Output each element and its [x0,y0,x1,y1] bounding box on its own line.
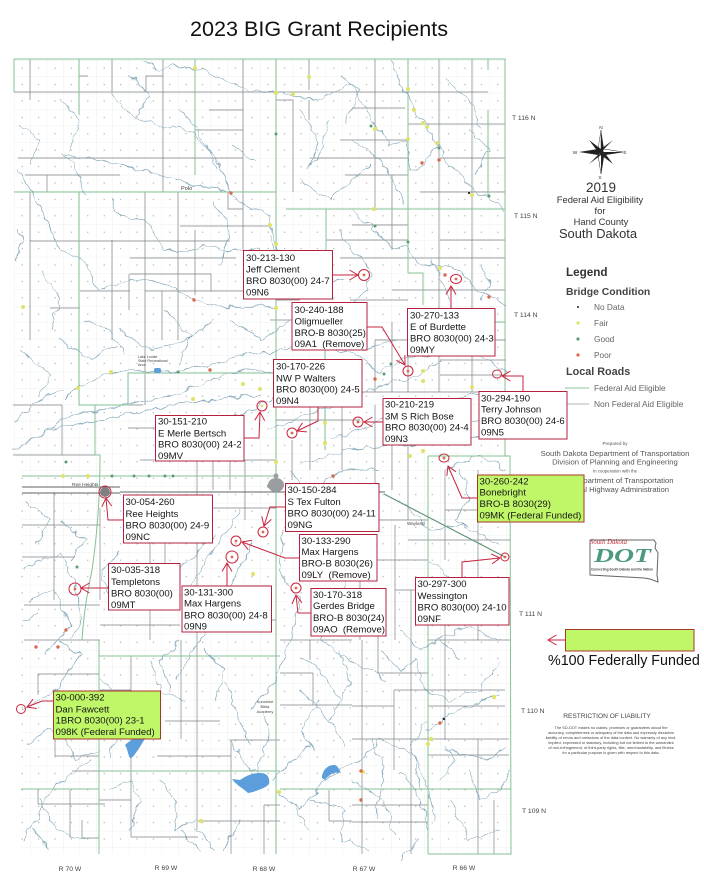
town labels: Ree Heights [72,482,99,488]
callout: 30-133-290 Max Hargens: Max Hargens [302,547,359,558]
callout: 30-210-219 3M S Rich Bose [383,398,471,445]
callout: 30-170-226 NW P Walters: BRO 8030(00) 24-5 [276,384,360,396]
title: 2023 BIG Grant Recipients [190,16,448,41]
restriction of liability: The SD-DOT makes no claims, promises or guarantees about the [554,725,668,730]
town of Miller [267,474,284,492]
callout: 30-294-190 Terry Johnson: 30-294-190 [481,394,530,404]
callout: 30-260-242 Bonebright (federally funded): 09MK (Federal Funded) [480,510,581,522]
callout: 30-131-300 Max Hargens: Max Hargens [184,598,241,610]
icon: compass rose: E [623,150,627,156]
legend: Poor [594,350,612,360]
callout: 30-270-133 E of Burdette [408,308,495,356]
callout: 30-270-133 E of Burdette: E of Burdette [410,322,466,333]
town labels: Polo [181,186,192,192]
callout: 30-297-300 Wessington: BRO 8030(00) 24-10 [418,602,507,614]
callout: 30-270-133 E of Burdette: 30-270-133 [410,310,459,322]
callout: 30-294-190 Terry Johnson: Terry Johnson [481,404,541,416]
map heading: Federal Aid Eligibility: Federal Aid Eligibility [557,194,644,205]
callout: 30-213-130 Jeff Clement: 30-213-130 [246,253,295,264]
town labels: State Recreational [138,359,168,363]
arrow: Dan Fawcett [16,701,53,714]
township labels: T 110 N [521,708,545,715]
callout: 30-170-226 NW P Walters: NW P Walters [276,374,336,384]
town labels: Wayland [407,521,425,526]
callout: 30-035-318 Templetons [108,564,180,611]
callout: 30-131-300 Max Hargens [182,586,272,632]
callout: 30-213-130 Jeff Clement [244,250,332,299]
restriction of liability: implied, expressed or statutory, including but not limited to the warranties [548,740,674,745]
logo: South Dakota DOT: DOT [593,545,652,567]
callout: 30-150-284 S Tex Fulton: S Tex Fulton [288,497,341,508]
callout: 30-000-392 Dan Fawcett (federally funded): 30-000-392 [56,692,105,704]
prepared by credits [541,441,689,494]
callout: 30-260-242 Bonebright (federally funded): 30-260-242 [480,476,529,488]
town labels [72,186,425,714]
callout: 30-170-318 Gerdes Bridge: 30-170-318 [313,590,362,601]
callout: 30-054-260 Ree Heights [124,495,212,543]
callout: 30-170-226 NW P Walters [274,360,362,407]
callout: 30-131-300 Max Hargens: 09N9 [184,622,207,632]
callout: 30-000-392 Dan Fawcett (federally funded) [54,691,160,739]
callout: 30-210-219 3M S Rich Bose: BRO 8030(00) 24-4 [385,422,469,434]
town labels: Bible [261,704,270,709]
restriction of liability [546,713,676,755]
callout: 30-000-392 Dan Fawcett (federally funded): Dan Fawcett [56,704,110,716]
callout: 30-294-190 Terry Johnson [479,392,567,439]
callout: 30-150-284 S Tex Fulton: 30-150-284 [288,485,337,496]
callout: 30-151-210 E Merle Bertsch: 09MV [158,451,184,462]
callout: 30-133-290 Max Hargens: 30-133-290 [302,536,351,547]
arrow: S Tex Fulton [258,507,285,537]
callout: 30-213-130 Jeff Clement: BRO 8030(00) 24-7 [246,276,330,287]
callout: 30-270-133 E of Burdette: BRO 8030(00) 24-3 [410,334,494,344]
callout: 30-170-318 Gerdes Bridge [311,588,386,636]
callout: 30-297-300 Wessington: 30-297-300 [418,579,467,590]
lakes [125,368,341,793]
callout: 30-294-190 Terry Johnson: BRO 8030(00) 24-6 [481,416,565,427]
callout: 30-170-226 NW P Walters: 30-170-226 [276,362,325,372]
callout: 30-131-300 Max Hargens: 30-131-300 [184,588,233,598]
township labels: T 116 N [512,115,536,122]
arrow: Max Hargens 133-290 [231,536,299,558]
prepared by credits: Division of Planning and Engineering [552,458,678,466]
arrow: Bonebright [439,454,477,498]
town labels: Area [138,363,146,367]
callout: 30-151-210 E Merle Bertsch [156,416,244,462]
township labels: T 111 N [519,611,542,618]
icon: compass rose [573,125,627,181]
arrow: Max Hargens 131-300 [226,551,238,586]
town labels: Sunshine [257,699,274,704]
arrow: Terry Johnson [492,370,523,392]
arrow: 3M S Rich Bose [353,417,383,427]
callout: 30-210-219 3M S Rich Bose: 09N3 [385,434,408,445]
callout: 30-170-318 Gerdes Bridge: BRO-B 8030(24) [313,613,384,624]
map of Hand County [13,59,511,860]
range labels: R 67 W [353,866,376,873]
logo: South Dakota DOT: South Dakota [590,537,627,546]
callout: 30-297-300 Wessington: Wessington [418,591,467,602]
map heading: Federal Aid Eligibility: South Dakota [559,226,638,241]
key: 100 percent federally funded: %100 Federally Funded [548,653,700,669]
arrow: Gerdes Bridge [291,583,311,613]
arrow: Wessington [462,553,509,577]
map heading: Federal Aid Eligibility [557,180,644,241]
callout: 30-054-260 Ree Heights: Ree Heights [126,509,178,520]
callout: 30-035-318 Templetons: BRO 8030(00) [111,588,173,600]
prepared by credits: South Dakota Department of Transportation [541,449,689,458]
arrow: Templetons [69,583,108,595]
legend: Federal Aid Eligible [594,383,666,393]
restriction of liability: liability of errors and omissions of the data content. No warranty of any kind, [546,735,676,740]
arrow: E Merle Bertsch [244,401,267,438]
callout: 30-297-300 Wessington [416,578,509,625]
arrow: E of Burdette [450,274,462,308]
township labels: T 109 N [522,808,546,815]
callout: 30-054-260 Ree Heights: BRO 8030(00) 24-9 [126,520,209,532]
prepared by credits: Federal Highway Administration [561,485,669,494]
callout: 30-131-300 Max Hargens: BRO 8030(00) 24-8 [184,610,268,622]
callout: 30-150-284 S Tex Fulton [286,484,379,532]
callout: 30-170-318 Gerdes Bridge: 09AO (Remove) [313,624,385,636]
interstate highway [22,487,385,493]
arrow: NW P Walters [287,407,318,438]
legend: No Data [594,302,625,312]
legend: Legend [566,266,608,279]
icon: compass rose: N [599,125,603,131]
arrow: Ree Heights [99,486,123,520]
town of Ree Heights [100,487,110,497]
town labels: Lake Louise [138,355,157,359]
township labels: T 114 N [514,312,538,319]
callout: 30-240-188 Oligmueller: 30-240-188 [294,305,344,316]
callout: 30-151-210 E Merle Bertsch: 30-151-210 [158,416,207,428]
federal highway diagonal [384,494,505,557]
federal aid eligible roads [14,59,511,854]
callout: 30-151-210 E Merle Bertsch: E Merle Bertsch [158,428,226,440]
callout: 30-150-284 S Tex Fulton: BRO 8030(00) 24-11 [288,508,376,520]
logo: South Dakota DOT: Connecting South Dakota and the Nation [591,568,653,572]
arrow: Oligmueller [367,327,413,376]
map heading: Federal Aid Eligibility: 2019 [586,180,616,195]
map heading: Federal Aid Eligibility: Hand County [574,216,629,227]
callout: 30-260-242 Bonebright (federally funded): Bonebright [480,488,526,498]
township labels [512,115,546,815]
callout: 30-035-318 Templetons: 09MT [111,600,136,611]
legend: Bridge Condition [566,287,650,298]
callout: 30-170-226 NW P Walters: 09N4 [276,396,300,407]
legend: Fair [594,318,609,328]
callout: 30-240-188 Oligmueller: Oligmueller [294,316,344,328]
callout: 30-240-188 Oligmueller: 09A1 (Remove) [294,339,364,350]
callout: 30-000-392 Dan Fawcett (federally funded): 098K (Federal Funded) [56,727,155,738]
callout: 30-000-392 Dan Fawcett (federally funded): 1BRO 8030(00) 23-1 [56,716,145,726]
callout: 30-297-300 Wessington: 09NF [418,614,441,625]
callout: 30-150-284 S Tex Fulton: 09NG [288,520,313,531]
callout: 30-170-318 Gerdes Bridge: Gerdes Bridge [313,601,375,612]
callout: 30-213-130 Jeff Clement: 09N6 [246,288,269,298]
callout: 30-133-290 Max Hargens: 09LY (Remove) [302,570,371,581]
key: 100 percent federally funded [548,630,700,669]
range labels: R 70 W [59,866,82,873]
prepared by credits: U.S. Department of Transportation [556,476,674,485]
callout: 30-210-219 3M S Rich Bose: 3M S Rich Bose [385,412,454,422]
range labels [59,865,476,873]
callout: 30-260-242 Bonebright (federally funded) [478,475,584,522]
bridge condition dots [21,66,496,823]
callout: 30-151-210 E Merle Bertsch: BRO 8030(00) 24-2 [158,440,242,450]
legend [565,266,684,409]
legend: Non Federal Aid Eligible [594,399,684,409]
logo: South Dakota DOT [590,537,658,582]
callout: 30-260-242 Bonebright (federally funded): BRO-B 8030(29) [480,499,551,510]
prepared by credits: In cooperation with the [593,468,638,474]
town labels: Academy [257,709,273,714]
callout: 30-133-290 Max Hargens: BRO-B 8030(26) [302,558,373,570]
range labels: R 69 W [155,865,178,872]
icon: compass rose: S [598,175,602,181]
callout: 30-035-318 Templetons: 30-035-318 [111,565,160,576]
icon: compass rose: W [573,150,578,156]
callout: 30-294-190 Terry Johnson: 09N5 [481,428,504,438]
prepared by credits: Prepared by [602,441,628,446]
range labels: R 66 W [453,865,476,872]
callout: 30-240-188 Oligmueller: BRO-B 8030(25) [294,328,366,339]
arrow: Jeff Clement [333,270,370,280]
restriction of liability: for a particular purpose is given with respect to this data. [562,750,660,755]
callout: 30-213-130 Jeff Clement: Jeff Clement [246,264,300,276]
callout: 30-054-260 Ree Heights: 09NC [126,532,150,543]
callout: 30-133-290 Max Hargens [300,534,377,581]
callout: 30-035-318 Templetons: Templetons [111,577,160,588]
legend: Good [594,334,615,344]
restriction of liability: accuracy, completeness or adequacy of the data and expressly disclaims [548,730,674,735]
range labels: R 68 W [253,866,276,873]
map heading: Federal Aid Eligibility: for [595,205,605,216]
legend: Local Roads [566,366,630,378]
callout: 30-270-133 E of Burdette: 09MY [410,345,436,356]
non federal local roads [13,59,510,854]
callout: 30-240-188 Oligmueller [292,302,367,350]
restriction of liability: of non-infringement, of third-party rights, title, merchantability, and fitness [548,745,674,750]
township labels: T 115 N [514,213,538,220]
callout: 30-210-219 3M S Rich Bose: 30-210-219 [385,400,434,410]
restriction of liability: RESTRICTION OF LIABILITY [563,713,651,720]
section grid [13,59,511,854]
rivers and streams [13,60,510,860]
callout: 30-054-260 Ree Heights: 30-054-260 [126,497,175,508]
